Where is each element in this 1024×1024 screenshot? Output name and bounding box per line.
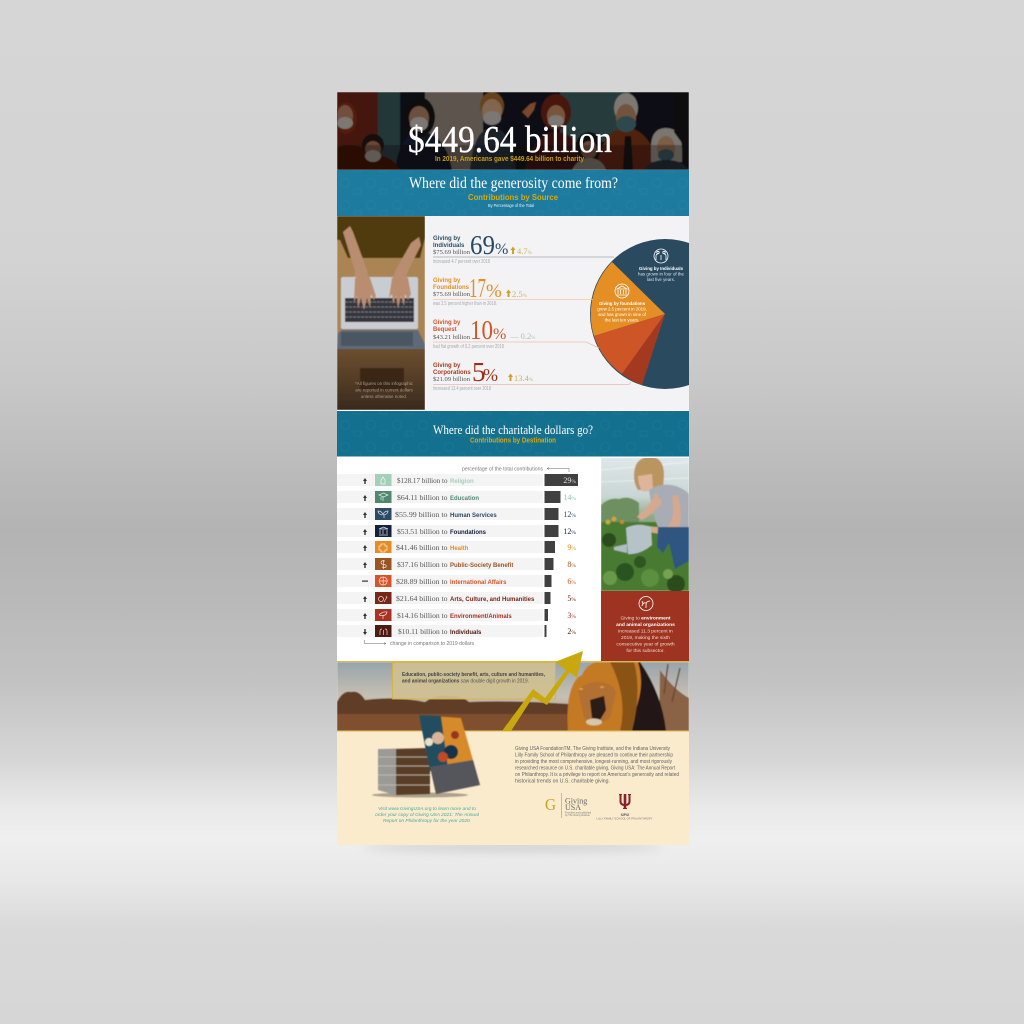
percentages: 29% [563,476,576,485]
partner statement: historical trends on U.S. charitable giving. [515,778,610,784]
axis note: percentage: percentage of the total contributions [462,466,544,472]
source row: individuals: Individuals [433,243,465,249]
logo: IUPUI Lilly School [596,794,653,820]
source row: individuals: % [495,241,508,258]
pie label: individuals: Giving by Individuals [639,266,684,271]
row backgrounds [337,474,543,637]
laptop photo caption: are reported in current dollars [355,388,414,392]
growth arrow [502,651,583,731]
percentages: 6% [567,577,576,586]
category labels: Public-Society Benefit [450,563,513,569]
callout text: consecutive year of growth [616,642,675,648]
logo: Giving USA: by The Giving Institute [565,814,590,817]
source note: By Percentage of the Total [488,203,534,208]
category labels: International Affairs [450,580,507,586]
icon: leaf [639,596,653,610]
pie chart: giving by source [590,239,689,389]
percentages: 12% [563,527,576,536]
category labels: Education [450,496,479,502]
category labels: Individuals [450,630,482,636]
photo: lion on savanna [337,662,689,731]
callout: double digit growth: and animal organizations saw double digit growth in 2019. [402,678,529,684]
source row: individuals [433,230,614,265]
amounts: $14.16 billion to [397,611,448,620]
panel: footer [337,715,689,845]
callout text: for this subsector. [626,648,665,654]
panel: contributions by destination [337,466,578,647]
gold divider [337,661,689,662]
percentages: 5% [567,594,576,603]
icon: people [654,249,668,263]
source row: bequest: % [493,326,506,343]
percentages: 9% [567,543,576,552]
axis note: change [364,640,475,647]
pie label: foundations: grew 2.5 percent in 2019, [597,306,647,312]
source row: foundations: 17 [469,273,486,303]
change arrows [362,478,368,635]
callout text: and animal organizations [616,622,675,628]
category labels: Foundations [450,530,487,536]
source row: individuals: 4.7% [517,246,532,256]
source heading: Where did the generosity come from? [409,175,618,192]
amounts: $53.51 billion to [397,527,448,536]
source row: bequest: 10 [470,315,493,345]
book stack and cover [372,715,480,798]
source row: bequest: had flat growth of 0.2 percent over 2018 [433,344,504,350]
source row: foundations: was 2.5 percent higher than in 2018. [433,301,497,307]
logo: IUPUI Lilly School: LILLY FAMILY SCHOOL OF PHILANTHROPY [596,816,653,820]
pie label: individuals: has grown in four of the [638,272,684,276]
source row: individuals: 69 [470,230,495,260]
source row: bequest: $43.21 billion [433,334,471,341]
source row: corporations: 13.4% [514,373,533,383]
percentages [563,476,576,636]
partner statement [515,746,679,784]
logo: Giving USA: Giving [565,796,587,806]
callout: double digit growth: Education, public-society benefit, arts, culture and humanities, [402,672,545,678]
book caption: Report on Philanthropy for the year 2020. [383,818,471,824]
hero illustration: masked crowd [335,92,689,170]
infographic panel background [337,92,689,845]
partner statement: Lilly Family School of Philanthropy are pleased to continue their partnership [515,752,673,758]
axis note: change: change in comparison to 2019 dollars [390,641,475,647]
amounts: $37.16 billion to [397,560,448,569]
source row: corporations: increased 13.4 percent over 2018 [433,386,491,392]
partner statement: on Philanthropy. It is a privilege to report on American's generosity and related [515,772,679,778]
source row: bequest: — 0.2% [509,331,535,341]
category icons [375,474,392,637]
panel shadow [363,842,663,852]
pie label: foundations: the last ten years. [605,318,639,322]
source row: corporations: Corporations [433,370,471,376]
partner statement: in providing the most comprehensive, longest-running, and most rigorously [515,759,672,765]
percentages: 8% [567,560,576,569]
source row: foundations: Giving by [433,278,461,284]
percentages: 3% [567,611,576,620]
logo: Giving USA: USA [565,803,581,812]
callout: environment and animals [601,591,689,661]
amounts: $55.99 billion to [395,510,448,519]
pie label: individuals: last five years. [647,277,675,282]
category labels [450,479,535,636]
section header: source [337,170,689,216]
logo: Giving USA: G [545,795,556,814]
callout text: Giving to environment [620,616,671,622]
pie label: foundations: Giving by foundations [599,301,646,306]
source row: foundations: % [486,281,502,302]
amounts: $28.89 billion to [396,577,448,586]
panel: contributions by source [337,216,689,410]
source row: bequest: Bequest [433,327,457,333]
percentages: 2% [567,627,576,636]
source row: corporations: Giving by [433,363,461,369]
subheading: In 2019, Americans gave $449.64 billion to charity [435,154,585,163]
amounts: $21.64 billion to [396,594,448,603]
category labels: Human Services [450,513,497,519]
source row: foundations: Foundations [433,285,470,291]
book caption: Visit www.GivingUSA.org to learn more and to [378,806,476,812]
logo: Giving USA: Founded and published [565,812,592,814]
headline: $449.64 billion [408,119,612,161]
pie label: foundations: and has grown in nine of [598,312,647,317]
photo: hands on laptop [337,216,425,410]
category labels: Health [450,546,469,552]
amounts: $64.11 billion to [397,493,448,502]
source row: corporations: $21.09 billion [433,376,471,383]
amounts: $10.11 billion to [398,627,448,636]
destination subheading: Contributions by Destination [470,438,556,444]
laptop photo caption: *All figures on this infographic [355,381,414,386]
amounts [395,476,448,636]
percentages: 12% [563,510,576,519]
callout text: increased 11.3 percent in [618,628,673,634]
source row: bequest [433,315,599,350]
source row: corporations: % [483,365,498,385]
percentages: 14% [563,493,576,502]
section header: destination [337,411,689,456]
logo: Giving USA [545,793,592,818]
partner statement: Giving USA FoundationTM, The Giving Institute, and the Indiana University [515,746,670,752]
category labels: Environment/Animals [450,614,512,620]
logo: IUPUI Lilly School: IUPUI [621,813,629,817]
destination heading: Where did the charitable dollars go? [433,422,593,437]
source row: foundations: 2.5% [512,289,527,299]
source row: foundations: $75.69 billion [433,291,471,298]
bar chart [544,474,578,637]
amounts: $41.46 billion to [396,543,448,552]
book caption: order your copy of Giving USA 2021: The Annual [375,812,480,818]
source row: corporations: 5 [472,357,486,387]
source row: individuals: $75.69 billion [433,249,471,256]
partner statement: researched resource on U.S. charitable giving, Giving USA: The Annual Report [515,766,675,772]
amounts: $128.17 billion to [397,476,448,485]
photo: girl watering plants [601,456,689,593]
source subheading: Contributions by Source [468,193,558,202]
source row: bequest: Giving by [433,320,461,326]
source row: foundations [433,273,593,307]
icon: foundation building [615,284,629,298]
source row: individuals: increased 4.7 percent over 2018 [433,259,490,265]
source row: corporations [433,357,631,392]
category labels: Arts, Culture, and Humanities [450,597,535,603]
laptop photo caption: unless otherwise noted. [361,394,407,399]
hero banner [335,92,689,170]
category labels: Religion [450,479,474,485]
callout: double digit growth [392,662,556,699]
source row: individuals: Giving by [433,236,461,242]
callout text: 2019, making the sixth [621,635,670,641]
